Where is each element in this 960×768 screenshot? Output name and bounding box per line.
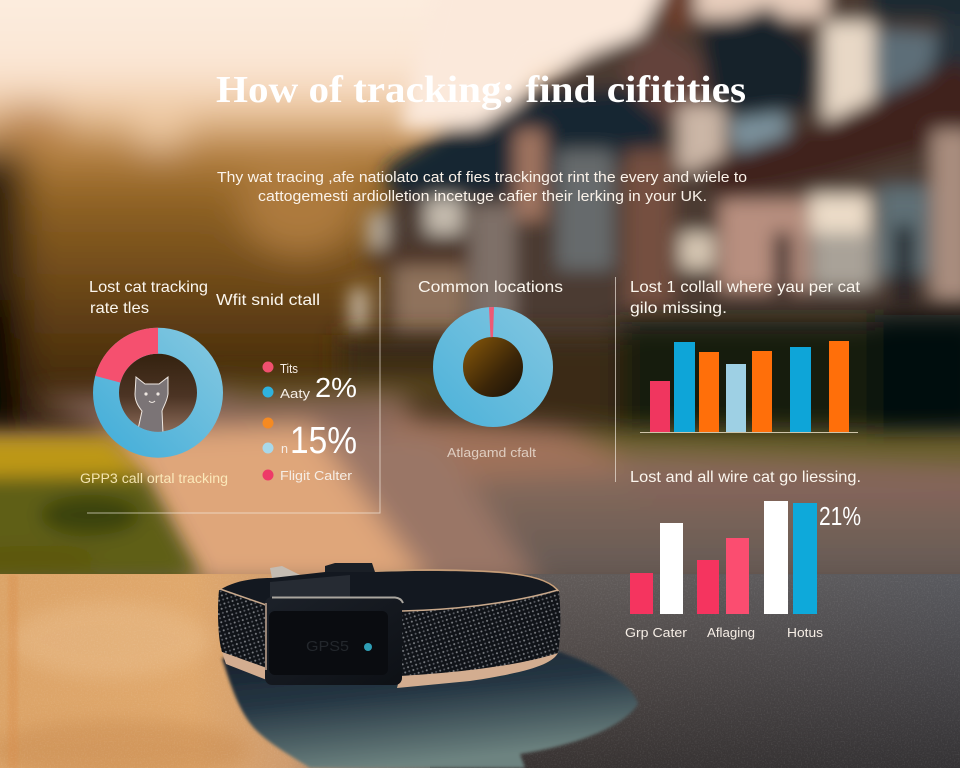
heading: Common locations: [418, 279, 563, 296]
heading: gilo missing.: [630, 300, 727, 317]
collar shadow: [222, 652, 638, 768]
bar chart: bottom: [630, 501, 817, 614]
tracker label: GPS5: [306, 638, 349, 655]
heading: Lost and all wire cat go liessing.: [630, 469, 861, 486]
caption: Atlagamd cfalt: [447, 446, 537, 460]
legend and stats: Tits: [280, 361, 298, 376]
axis labels: [625, 625, 824, 640]
panel: where cats go missing: [616, 277, 861, 482]
panel: lost cat tracking rate: [80, 277, 380, 513]
title: How of tracking: find cifitities: [216, 69, 746, 111]
value label: 21%: [819, 501, 861, 531]
panel: common locations: [418, 279, 563, 460]
legend and stats: [262, 361, 357, 483]
heading: lost cat tracking: [89, 279, 208, 317]
intro text: [217, 169, 747, 205]
legend and stats: 2%: [315, 372, 357, 403]
axis labels: Aflaging: [707, 625, 755, 640]
panel: lost and all: [625, 469, 861, 640]
panel divider: [614, 277, 616, 482]
legend and stats: n: [281, 441, 288, 456]
collar with GPS tracker: [218, 563, 560, 688]
icon: cat: [135, 377, 168, 434]
intro text: cattogemesti ardiolletion incetuge cafier their lerking in your UK.: [258, 188, 707, 205]
donut chart: [448, 307, 538, 412]
axis labels: Grp Cater: [625, 625, 688, 640]
heading: Lost 1 collall where yau per cat: [630, 279, 861, 296]
donut chart with cat: [106, 341, 210, 445]
intro text: Thy wat tracing ,afe natiolato cat of fies trackingot rint the every and wiele to: [217, 169, 747, 186]
legend and stats: Fligit Calter: [280, 468, 353, 483]
buckle: [270, 563, 375, 583]
bar chart: top: [640, 341, 858, 432]
status light: [364, 643, 372, 651]
collar band front: [218, 590, 268, 668]
panel frame: [87, 277, 380, 513]
legend and stats: 15%: [290, 420, 357, 462]
caption: GPP3 call ortal tracking: [80, 471, 228, 486]
tracker module: [265, 597, 403, 685]
collar tan edges: [222, 652, 558, 688]
legend and stats: Aaty: [280, 386, 311, 401]
heading: second: Wfit snid ctall: [216, 292, 320, 309]
collar band back: [220, 571, 559, 614]
heading: lost cat tracking: rate tles: [90, 300, 149, 317]
axis labels: Hotus: [787, 625, 824, 640]
heading: lost cat tracking: Lost cat tracking: [89, 279, 208, 296]
heading: [630, 279, 861, 317]
